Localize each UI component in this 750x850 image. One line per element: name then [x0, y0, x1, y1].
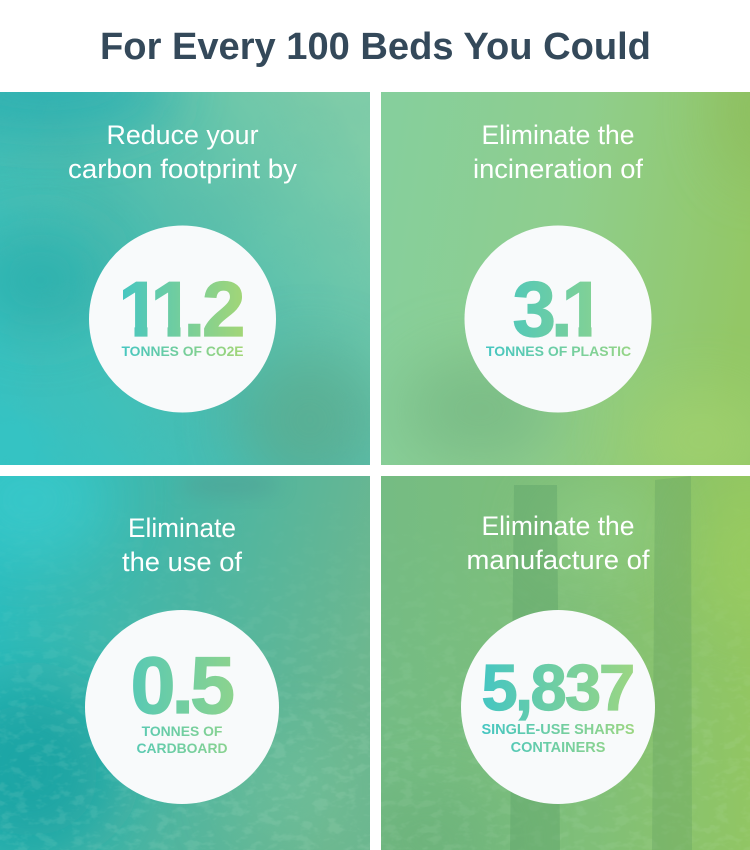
unit: CARDBOARD: [136, 740, 228, 756]
number: [123, 280, 243, 337]
number: .2: [184, 265, 245, 353]
stat circle: [464, 226, 652, 412]
background: green chimneys: [350, 476, 750, 850]
title: For Every 100 Beds You Could: [100, 26, 651, 68]
panel: sharps containers: manufacture of: [466, 545, 650, 575]
panel: plastic: incineration of: [473, 154, 643, 184]
panel: cardboard: [0, 440, 370, 850]
unit: TONNES OF CO2E: [121, 343, 244, 359]
unit: CONTAINERS: [511, 740, 606, 756]
number: [514, 280, 592, 338]
lead text: Eliminate the: [482, 120, 634, 150]
panel: cardboard: the use of: [122, 547, 242, 577]
panel: carbon footprint: [0, 92, 370, 465]
lead text: Eliminate the: [482, 511, 634, 541]
number: 11: [118, 265, 194, 353]
stat circle: [85, 610, 279, 804]
background: teal smoke: [0, 92, 370, 465]
background: green smoke: [381, 92, 750, 465]
unit: TONNES OF PLASTIC: [486, 343, 631, 359]
number: 1: [562, 265, 605, 353]
number: 5,837: [482, 651, 635, 724]
chimney right: [652, 476, 692, 850]
unit: SINGLE-USE SHARPS: [481, 722, 635, 738]
number: 0.5: [130, 641, 235, 731]
panel: carbon footprint: carbon footprint by: [68, 154, 298, 184]
stat circle: [89, 226, 276, 412]
lead text: Eliminate: [128, 513, 236, 543]
background: teal aerial city: [0, 440, 370, 850]
panel: sharps containers: [350, 476, 750, 850]
unit: TONNES OF: [142, 723, 222, 739]
stat circle: [461, 610, 655, 804]
panel: plastic: [381, 92, 750, 465]
lead text: Reduce your: [106, 120, 259, 150]
number: 3.: [512, 265, 573, 353]
chimney left: [510, 485, 560, 850]
